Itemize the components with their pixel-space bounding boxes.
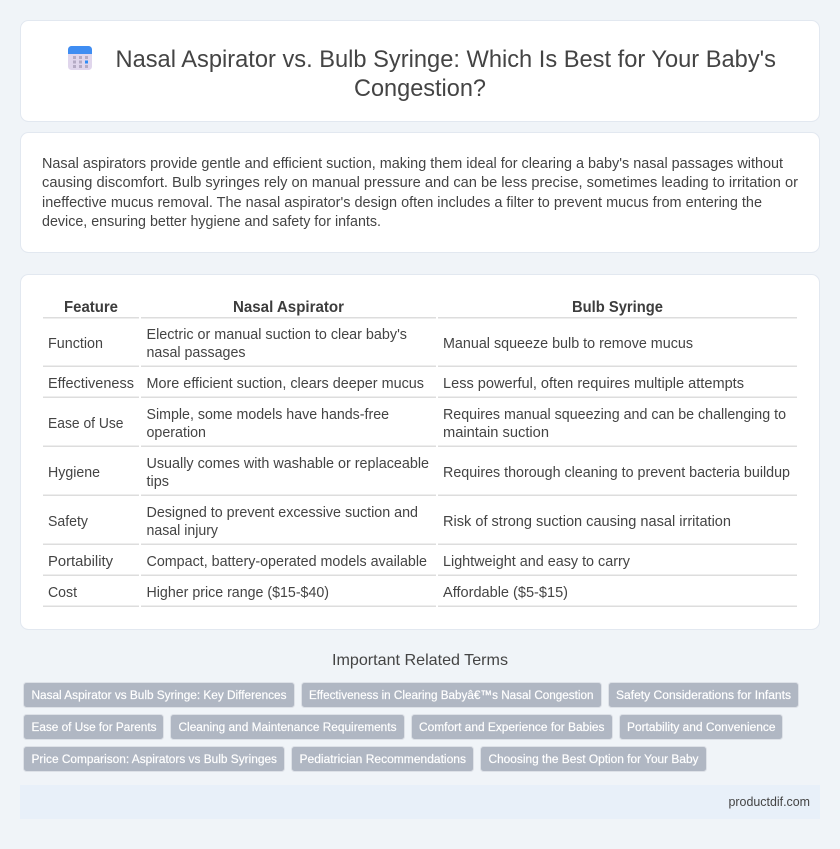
row: safety: Risk of strong suction causing nasal irritation (443, 514, 731, 530)
related term tags: Effectiveness in Clearing Babyâ€™s Nasal Congestion (309, 688, 594, 702)
row: effectiveness: Less powerful, often requires multiple attempts (443, 376, 744, 392)
related term tags: Choosing the Best Option for Your Baby (488, 752, 699, 766)
related term tags: Cleaning and Maintenance Requirements (178, 720, 396, 734)
table header row: Nasal Aspirator (233, 299, 344, 316)
row: hygiene: Usually comes with washable or replaceable (146, 456, 429, 472)
table rules (43, 317, 797, 607)
row: function: Function (48, 336, 103, 352)
footer site name: productdif.com (728, 794, 810, 809)
row: portability: Portability (48, 554, 114, 570)
row: function: Electric or manual suction to clear baby's (146, 327, 407, 343)
row: ease of use: Ease of Use (48, 416, 124, 432)
panel: title header (20, 20, 820, 122)
row: portability: Lightweight and easy to carry (443, 554, 631, 570)
row: safety: Safety (48, 514, 89, 530)
table header row: Feature (64, 299, 118, 316)
row: cost (48, 585, 568, 601)
table header row (64, 299, 663, 316)
row: ease of use: operation (146, 425, 206, 441)
title: Nasal Aspirator vs. Bulb Syringe: Which Is Best for Your Baby's (116, 46, 776, 73)
row: safety: nasal injury (146, 523, 219, 539)
row: safety (48, 505, 731, 539)
row: effectiveness: More efficient suction, clears deeper mucus (146, 376, 424, 392)
row: cost: Cost (48, 585, 77, 601)
row: portability: Compact, battery-operated models available (146, 554, 427, 570)
icon: calendar (68, 46, 92, 70)
panel: comparison table (20, 274, 820, 630)
text block: introduction paragraph: device, ensuring better hygiene and safety for infants. (42, 214, 381, 230)
row: ease of use (48, 407, 786, 441)
title (116, 46, 776, 102)
row: function: nasal passages (146, 345, 246, 361)
text block: introduction paragraph (42, 156, 798, 230)
related term tags: Safety Considerations for Infants (616, 688, 791, 702)
row: effectiveness: Effectiveness (48, 376, 134, 392)
heading: important related terms: Important Related Terms (332, 652, 508, 669)
row: hygiene: Hygiene (48, 465, 100, 481)
row: function: Manual squeeze bulb to remove mucus (443, 336, 693, 352)
row: ease of use: Simple, some models have hands-free (146, 407, 389, 423)
related term tags: Portability and Convenience (627, 720, 776, 734)
related term tags: Ease of Use for Parents (32, 720, 156, 734)
row: cost: Affordable ($5-$15) (443, 585, 568, 601)
related term tags: Comfort and Experience for Babies (419, 720, 604, 734)
row: ease of use: Requires manual squeezing and can be challenging to (443, 407, 786, 423)
related term tags: Price Comparison: Aspirators vs Bulb Syringes (32, 752, 277, 766)
text block: introduction paragraph: ineffective mucus removal. The nasal aspirator's design often includes a filter to prevent mucus from entering the (42, 195, 762, 211)
row: effectiveness (48, 376, 744, 392)
row: hygiene (48, 456, 790, 490)
row: function (48, 327, 693, 361)
text block: introduction paragraph: causing discomfort. Bulb syringes rely on manual pressure and can be less precise, sometimes leading to irritation or (42, 175, 798, 191)
row: hygiene: tips (146, 474, 169, 490)
row: hygiene: Requires thorough cleaning to prevent bacteria buildup (443, 465, 790, 481)
panel: introduction (20, 132, 820, 252)
related term tags (24, 682, 798, 772)
row: ease of use: maintain suction (443, 425, 549, 441)
title: Congestion? (354, 75, 486, 102)
table header row: Bulb Syringe (572, 299, 663, 316)
row: safety: Designed to prevent excessive suction and (146, 505, 418, 521)
text block: introduction paragraph: Nasal aspirators provide gentle and efficient suction, making them ideal for clearing a baby's nasal passages without (42, 156, 783, 172)
row: portability (48, 554, 631, 570)
related term tags: Nasal Aspirator vs Bulb Syringe: Key Differences (32, 688, 286, 702)
row: cost: Higher price range ($15-$40) (146, 585, 329, 601)
footer bar (20, 785, 820, 819)
related term tags: Pediatrician Recommendations (300, 752, 466, 766)
